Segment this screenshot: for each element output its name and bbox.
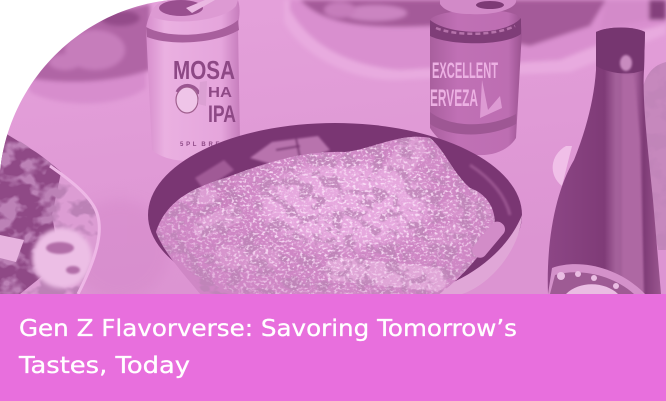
- can: Excellent Cerveza: [430, 0, 522, 155]
- can: Mosaic Hazy IPA: [146, 0, 240, 161]
- fries and cheese: [156, 136, 495, 294]
- table surface: [0, 0, 666, 294]
- large fry on right rim: [472, 222, 505, 258]
- blurred back-left bowl: [25, 4, 150, 104]
- can: Excellent Cerveza: ERVEZA: [430, 85, 478, 112]
- can: Mosaic Hazy IPA: MOSA: [173, 55, 235, 85]
- bottle: [548, 28, 661, 294]
- title band: [0, 294, 666, 401]
- can: Mosaic Hazy IPA: IPA: [208, 101, 236, 128]
- central bowl of fries: [148, 123, 522, 307]
- title text: Tastes, Today: [18, 351, 190, 379]
- food photo with duotone tint and curved corner: [0, 0, 666, 294]
- right-edge pizza: [644, 62, 666, 250]
- white plate behind bottle: [553, 146, 572, 186]
- soft shadow beside bowl: [108, 210, 120, 214]
- title text: Gen Z Flavorverse: Savoring Tomorrow’s: [19, 314, 517, 342]
- can: Mosaic Hazy IPA: 5 P L B R E W: [180, 142, 228, 148]
- can: Excellent Cerveza: EXCELLENT: [432, 58, 498, 83]
- title text: [18, 314, 517, 379]
- back-right plate with food: [284, 0, 666, 80]
- left pizza crust edge: [50, 166, 99, 294]
- left pizza slice: [0, 134, 98, 294]
- can: Mosaic Hazy IPA: HA: [208, 84, 232, 101]
